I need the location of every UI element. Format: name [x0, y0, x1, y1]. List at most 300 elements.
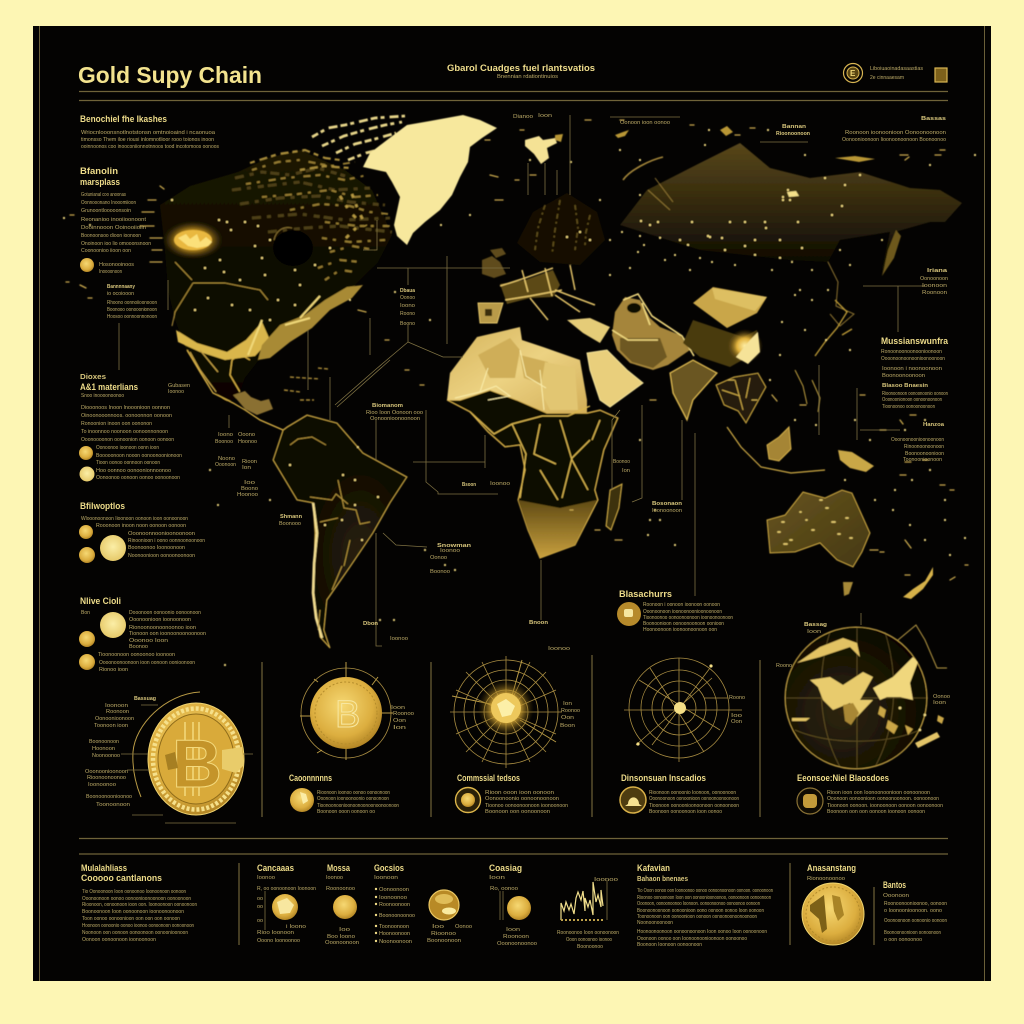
- map annotations: [168, 113, 948, 652]
- panel: coinage: Ooonoon ioonoonoonio oonoonoon: [317, 796, 389, 802]
- footer: coasiag: Coasiag: [489, 863, 522, 873]
- header badge and note: 2e cinnaaesam: [870, 75, 904, 81]
- footer: mossa: Mossa: [327, 863, 351, 873]
- callout: blasachurrs: [617, 589, 733, 633]
- callout: native gold: [79, 596, 206, 673]
- callout: materials: Snoo inoooonoonoo: [81, 393, 124, 399]
- callout: native gold: Tioonoonoon oonoonoo ioonoon: [98, 652, 175, 658]
- panel: coinage: [289, 662, 414, 815]
- callout: blasachurrs: Boonoonioon oonoonoonoon oonioon: [643, 621, 724, 627]
- coin labels: Ioonoon: [105, 703, 128, 709]
- footer: market overview: Boonoonoon Ioon oonoonoon ioonoonoonoon: [82, 909, 184, 915]
- panel: coinage: Boonoon ooon oonoon oo: [317, 809, 375, 815]
- callout: native gold: Dooonoon oonoonio oonoonoon: [129, 610, 201, 616]
- callout: mussian sources: Rioonoonoon oonoonoonio oonoon: [882, 391, 948, 397]
- callout: materials: Ronoonion inoon oon oononon: [81, 421, 152, 427]
- footer: gocsios list: [374, 863, 472, 945]
- callout: materials: Tioon oonoo oonnoon oonoon: [96, 460, 160, 466]
- radar labels: [729, 695, 745, 725]
- map annotations: Iriana: [927, 268, 947, 274]
- map annotations: Ioonoo: [490, 481, 510, 487]
- icon: blasachurrs coin: [617, 602, 641, 626]
- callout: production: Inoooonoon: [99, 269, 122, 275]
- footer: market overview: Oonoon oonoonoon ioonoonoon: [82, 937, 156, 943]
- panel: economic globe: Tioonoon oonoon. ioonoonoon oonoon oonoonoon: [827, 803, 943, 809]
- globe: [785, 625, 947, 769]
- callout: production: Grunoontlooooonsoin: [81, 208, 131, 214]
- map annotations: Hoonoo: [238, 439, 257, 445]
- coin labels: Boonoonoon: [89, 739, 119, 745]
- map annotations: Ioonoonoon: [652, 508, 682, 514]
- callout: blasachurrs: Blasachurrs: [619, 589, 672, 599]
- callout: mussian sources: [881, 336, 949, 410]
- footer: market overview: Noonoon oon oonoon oonoonoon oonoonioonoon: [82, 930, 188, 936]
- globe labels: Ioon: [933, 700, 946, 706]
- radar labels: Oon: [731, 719, 742, 725]
- world map: [64, 115, 975, 665]
- footer: kafavian text: Kafavian: [637, 863, 670, 873]
- arabia: [587, 350, 643, 407]
- callout: production: [80, 166, 151, 275]
- callout: materials: Dioxes: [80, 374, 106, 381]
- footer: cancaaas: oo: [257, 904, 263, 910]
- panel: coinage: Caoonnnnns: [289, 773, 332, 783]
- title: Gold Supy Chain: [78, 62, 262, 88]
- callout: production: Onoinoon ioo lio omooonsnoon: [81, 241, 151, 247]
- footer: market overview: Cooooo cantlanons: [81, 873, 162, 883]
- footer: market overview: Ooonoonoon oonoo oonoonioonoonoon oonoonoon: [82, 896, 191, 902]
- footer: kafavian text: Tio Ooon oonoo oon Ioonoonoo oonoo oonoonoonoon oonoon. oonoonoon: [637, 888, 773, 894]
- map annotations: Bsoon: [462, 482, 476, 488]
- callout: mussian sources: Oooonoonoonoonioonoonoon: [881, 356, 945, 362]
- map annotations: Ioonoon: [922, 283, 947, 289]
- footer: bar line chart: Ioonoo: [594, 877, 618, 883]
- coin labels: Roonoo: [393, 711, 414, 717]
- callout: native gold: Ooonoo Ioon: [129, 638, 168, 644]
- callout: materials: A&1 materlians: [80, 382, 138, 392]
- callout: materials: Diooonoos Inoon lnooonioon oonnon: [81, 405, 170, 411]
- map annotations: Ioonoo: [548, 646, 570, 652]
- footer: bantos notes: o oon oonoonoo: [884, 937, 922, 943]
- callout: production: Reonanioo inooiioonoont: [81, 217, 147, 223]
- callout: mussian sources: Blasoo Bnaesin: [882, 383, 928, 389]
- map annotations: Bnoon: [529, 620, 548, 626]
- footer: gocsios list: Boonoonoonoo: [379, 913, 415, 919]
- radar labels: Roono: [729, 695, 745, 701]
- footer: coasiag: [489, 863, 537, 947]
- footer rules: [79, 838, 948, 945]
- callout: materials: [79, 374, 182, 482]
- map annotations: Ooono: [238, 432, 255, 438]
- map annotations: Snowman: [437, 543, 471, 549]
- callout: bannan note: Hoosoo oonnoonnonoon: [107, 314, 157, 320]
- radar labels: Ion: [563, 701, 572, 707]
- footer: mossa: Ioo: [339, 927, 350, 933]
- footer: bar line chart: Ooon oonoonoo ioonoo: [566, 937, 612, 943]
- us and mexico coasts: [172, 262, 268, 326]
- footer: bar line chart: Roonoonoo Ioon oonoonoon: [557, 930, 619, 936]
- panel: dimensional radar: Rioonoon oonoonio Ioonoon, oonoonoon: [649, 790, 736, 796]
- north america landmass: [160, 116, 405, 430]
- footer: cancaaas: i Ioono: [286, 924, 306, 930]
- panel: dimensional radar: Dinsonsuan Inscadios: [621, 773, 706, 783]
- callout: sustainability: Ooonoonnoonioonoonoon: [128, 531, 195, 537]
- footer: kafavian text: Rioonoo oonoonoon Ioon oon oonoonioonoonoo, oonoonoon oonoonoon: [637, 895, 771, 901]
- footer: assurance coin: Rionoonoonoo: [807, 876, 845, 882]
- callout: sustainability: Noonoonioon oonoonoonoon: [128, 553, 195, 559]
- globe labels: Roono: [776, 663, 792, 669]
- coin: [272, 894, 298, 920]
- panel: dimensional radar: Boonoon oonoonoon ioon oonoo: [649, 809, 722, 815]
- map annotations: Ioono: [218, 432, 233, 438]
- map annotations: Ioono: [400, 303, 415, 309]
- africa: [447, 327, 622, 558]
- footer: bantos notes: Roonoonoonioonoo, oonoon: [884, 901, 947, 907]
- panel: coinage: Rioonoon ioonoo oonoo oonoonoon: [317, 790, 390, 796]
- footer: kafavian text: Toonoonoon oon oonoonioon oonoon oonoonoonoonoonoon: [637, 914, 757, 920]
- footer: assurance coin: [802, 863, 864, 945]
- coin labels: Roonoon: [106, 709, 129, 715]
- callout: blasachurrs: Tioonoonoo oonoonoonoon ioonoonoonoon: [643, 615, 733, 621]
- footer: bar line chart: Boonoonoo: [577, 944, 603, 950]
- greenland: [363, 115, 497, 245]
- map annotations: Boono: [241, 486, 258, 492]
- coin labels: Ioon: [391, 705, 405, 711]
- footer: market overview: Hoonoon oonoonio oonoo ioonoo oonoonoon oonoonoon: [82, 923, 194, 929]
- panel: commercial radar: Commssial tedsos: [457, 773, 520, 783]
- panel dividers: [262, 655, 760, 817]
- panel: commercial radar: Boonoon oon oonoonoon: [485, 809, 550, 815]
- callout: mussian sources: Ronoonoonoonoonioonoon: [881, 349, 942, 355]
- coin labels: Toonoon ioon: [94, 723, 128, 729]
- map annotations: Dianoo: [513, 114, 533, 120]
- panel: economic globe: Eeonsoe:Niel Blaosdoes: [797, 773, 889, 783]
- map annotations: Bassas: [921, 116, 946, 122]
- panel: dimensional radar: Tioonoon oonoonioonoonoon oonoonoon: [649, 803, 739, 809]
- footer: kafavian text: Boonoon Ioonoon oonoonoon: [637, 942, 702, 948]
- callout: production: Oonnooonano Inooomiioon: [81, 200, 136, 206]
- radar labels: Boon: [560, 723, 575, 729]
- footer: cancaaas: oo: [257, 896, 263, 902]
- callout: mussian sources: Boonoonoonoon: [882, 373, 925, 379]
- footer: gocsios list: Oonoo: [455, 924, 472, 930]
- coin labels: Noonoonoo: [92, 753, 120, 759]
- footer: kafavian text: Hoonoonoonoon oonoonoonoon Ioon oonoo Ioon oonoonoon: [637, 929, 767, 935]
- icon: commercial: [456, 788, 480, 812]
- medium coin with rings: [300, 662, 393, 760]
- callout: native gold: Rionoo ioon: [99, 667, 128, 673]
- header subtitle: [447, 63, 595, 80]
- footer: cancaaas: [257, 863, 316, 944]
- callout: blasachurrs: Ooonoonoon ioonoonoonioonoonoon: [643, 609, 722, 615]
- footer: kafavian text: Ooonoon, oonoonoonoo Ioonoon. oonoonoonoo oonoonoo oonoon: [637, 901, 760, 907]
- list bullets: [375, 889, 377, 941]
- coin labels: [85, 696, 156, 808]
- map annotations: Ion: [242, 465, 251, 471]
- callout: blasachurrs: Hoonoonoon ioonoonoonoon oon: [643, 627, 717, 633]
- icon: sustainability coins: [79, 525, 93, 539]
- footer: gocsios list: Ioonoonoo: [379, 895, 407, 901]
- callout: sustainability: Wlooonoonoon Iioonoon oonoon ioon oonoonoon: [81, 516, 188, 522]
- footer: market overview: Toon oonoo oonoonioon oon oon oon oonoon: [82, 916, 180, 922]
- panel: dimensional radar: [620, 658, 745, 815]
- panel: coinage: Tioonoonoonioonoonoonoonoonoonoon: [317, 803, 399, 809]
- coin callout arc: [133, 692, 200, 797]
- footer: mossa: Boo Ioono: [327, 934, 355, 940]
- footer: cancaaas: Ioonoo: [257, 875, 275, 881]
- panel: economic globe: [776, 622, 950, 815]
- footer: assurance coin: Anasanstang: [807, 863, 856, 873]
- callout: native gold: Boonoo: [129, 644, 148, 650]
- footer: bantos notes: Ooonoon: [883, 893, 909, 899]
- callout: production: Hosonooinoos: [99, 262, 135, 268]
- header subtitle: Bnennian rdationtinuios: [497, 74, 559, 80]
- footer: cancaaas: oo: [257, 918, 263, 924]
- eurasia northern belt: [517, 126, 962, 326]
- coin labels: Toonoonoon: [96, 802, 130, 808]
- callout: materials: Hoo oonnoo oonoonionnoonoo: [96, 468, 171, 474]
- coin labels: Ion: [393, 725, 406, 731]
- icon: coinage: [290, 788, 314, 812]
- south america: [273, 415, 407, 648]
- header badge and note: Liboiuaoinadasaastias: [870, 66, 924, 72]
- map annotations: Rioon: [242, 459, 257, 465]
- callout: production: marsplass: [80, 177, 120, 187]
- footer: gocsios list: Rioonoo: [431, 931, 456, 937]
- icon: native gold coins: [100, 612, 126, 638]
- map annotations: Dbon: [363, 621, 378, 627]
- callout: native gold: Oooonoonoonoon ioon oonoon oonioonoon: [99, 660, 195, 666]
- panel: commercial radar: Rioon ooon ioon oonoon: [485, 790, 554, 796]
- panel: economic globe: Boonoon oon oon oonoon ioonoon oonoon: [827, 809, 925, 815]
- map annotations: Ioonoo: [168, 389, 184, 395]
- map annotations: Biomanom: [372, 403, 404, 409]
- map annotations: Ioonoo: [390, 636, 408, 642]
- map annotations: Roonoon: [922, 290, 947, 296]
- footer: kafavian text: Bahaon bnenaes: [637, 876, 688, 883]
- header badge and note: [844, 64, 947, 82]
- footer: gocsios list: Boonoonoon: [427, 938, 461, 944]
- canadian fragments dim: [232, 168, 392, 232]
- callout: materials: Oonoonoo ioonoon oonn ioon: [96, 445, 159, 451]
- panel: commercial radar: Tioonoo oonoonoonoon ioonoonoon: [485, 803, 568, 809]
- footer: cancaaas: Rioo Ioonoon: [257, 930, 294, 936]
- callout: native gold: Nlive Cioli: [80, 596, 121, 606]
- callout: mussian sources: Ioonoon i noonoonoon: [882, 366, 942, 372]
- globe labels: Oonoo: [933, 694, 950, 700]
- map annotations: Noono: [218, 456, 235, 462]
- panel: commercial radar: Oonoonoonio oonoonoonoon: [485, 796, 559, 802]
- callout: sustainability: Boonoonoo Ioonoonoon: [128, 545, 185, 551]
- footer: kafavian text: Boonoonoonoon oonoonioon oono oonoon oonoo Ioon oonoon: [637, 908, 764, 914]
- callout: native gold: Rionoonoonoonoonoo ioon: [129, 625, 196, 631]
- south east asia: [716, 300, 874, 473]
- callout: global overview: ooinnoonos coo inooconiionnotnnoos tood incotomoos oonoos: [81, 144, 219, 150]
- panel: dimensional radar: Ooonoonoon oonoonioon oonoonoonoonoon: [649, 796, 739, 802]
- footer: cancaaas: R, oo oonoonoon Ioonoon: [257, 886, 316, 892]
- callout: global overview: Wriocnlooonsnotlnotstonsn omtnoioaind i ncaonuoa: [81, 130, 215, 136]
- footer: coasiag: Roonoon: [503, 934, 529, 940]
- coin: [333, 895, 357, 919]
- globe labels: Bassag: [804, 622, 827, 628]
- pale arctic fragments: [312, 116, 405, 160]
- callout: materials: Booooonoon nooon oonoonoonionoon: [96, 453, 182, 459]
- icon: materials coins: [79, 446, 93, 460]
- callout: materials: Oinoonooonnoos. oonoonnon oonoon: [81, 413, 172, 419]
- map annotations: Ioo: [244, 480, 255, 486]
- map annotations: Oonoon ioon oonoo: [620, 120, 670, 126]
- callout: blasachurrs: Roonoon i oonoon ioonoon oonoon: [643, 602, 720, 608]
- callout: native gold: Ooonoonioon ioonoonoon: [129, 617, 191, 623]
- callout: materials: Ooonoooonon oonoonion oonoon oonoon: [81, 437, 174, 443]
- icon: production coin: [80, 258, 94, 272]
- callout: materials: Oonoonoo oonoon oonoo oonoonoon: [96, 475, 180, 481]
- footer: coasiag: Ooonoonoonoo: [497, 941, 537, 947]
- footer: cancaaas: Ooono Ioonoonoo: [257, 938, 300, 944]
- footer: kafavian text: Ooonoon oonoo oon Ioonoonoonioonoon oonoonoo: [637, 936, 747, 942]
- callout: sustainability: Rooonoon inoon noon oonoon oonoon: [96, 523, 186, 529]
- footer: mossa: Roonoonoo: [326, 886, 355, 892]
- footer: gocsios list: Noonoonoon: [379, 939, 412, 945]
- large coin: [148, 703, 244, 815]
- callout: mussian sources: Ooonoonionoon oonoonoonoon: [882, 397, 942, 403]
- callout: global overview: Benochiel fhe Ikashes: [80, 114, 167, 124]
- footer: bantos notes: Boonoonoonioon oonoonoon: [884, 930, 941, 936]
- map annotations: Gubasen: [168, 383, 190, 389]
- footer: coasiag: Ioon: [489, 875, 505, 881]
- footer: market overview: Rioonoon, oonoonoon ioon oon. Ioonoonoon oonoonoon: [82, 902, 197, 908]
- map annotations: Roonoon ioonoonioon Oonoonoonoon: [845, 130, 946, 136]
- footer: coasiag: Ioon: [506, 927, 520, 933]
- footer: gocsios list: Ioo: [432, 924, 444, 930]
- callout: hanzoa: Hanzoa: [923, 422, 944, 428]
- coin labels: Hoonoon: [92, 746, 115, 752]
- footer: bar line chart: [557, 877, 619, 950]
- map annotations: Ooonoon: [215, 462, 236, 468]
- globe labels: [776, 622, 950, 706]
- callout: production: Gotunianal coo anoonas: [81, 192, 126, 198]
- callout: hanzoa: Boonoonoonioon: [905, 451, 944, 457]
- callout: native gold: Bon: [81, 610, 90, 616]
- footer: market overview: [81, 863, 197, 943]
- footer: kafavian text: Noonoonoonoon: [637, 920, 673, 926]
- footer: kafavian text: [637, 863, 773, 948]
- map annotations: Boonoo: [613, 459, 630, 465]
- india: [670, 360, 717, 420]
- radar labels: Roonoo: [561, 708, 580, 714]
- radar chart two: [624, 658, 742, 762]
- coin labels: Ioonoonoo: [88, 782, 116, 788]
- australia: [767, 490, 933, 599]
- footer: bantos notes: Ooonoonoon oonoonio oonoon: [884, 918, 947, 924]
- footer: mossa: Ioonoo: [326, 875, 343, 881]
- map annotations: Oonoo: [400, 295, 415, 301]
- callout: production: Coonoonioo iioon oon: [81, 248, 131, 254]
- map annotations: Oonoonioonoon Iioonoonoonoon Boonoonoo: [842, 137, 946, 143]
- header rules: [79, 92, 948, 100]
- map annotations: Rioonoonoon: [776, 131, 810, 137]
- callout: mussian sources: Tioonoonoo oonoonoonoon: [882, 404, 935, 410]
- footer: mossa: [325, 863, 359, 946]
- coin labels: Oon: [393, 718, 406, 724]
- map annotations: Roono: [400, 311, 415, 317]
- footer: market overview: Tio Oonoonoon Ioon oonoonoo Ioonoonoon oonoon: [82, 889, 186, 895]
- coin labels: Boonoonoonioonoo: [86, 794, 132, 800]
- map leader lines: [119, 115, 925, 646]
- callout: hanzoa: [891, 422, 944, 463]
- radar labels: [560, 701, 580, 729]
- callout: sustainability: Bfilwoptlos: [80, 501, 125, 511]
- callout: native gold: Tionoon oon ioonoonoonoonoon: [129, 631, 206, 637]
- map annotations: Oonoonoon: [920, 276, 948, 282]
- map annotations: Boono: [400, 321, 415, 327]
- map annotations: Dbaua: [400, 288, 415, 294]
- callout: production: Bfanolin: [80, 166, 118, 176]
- map annotations: Boonoo: [430, 569, 450, 575]
- callout: production: Boonoonsoo dioon ioonoon: [81, 233, 141, 239]
- callout: bannan note: io ocoiooon: [107, 291, 134, 297]
- callout: sustainability: Rinoonioon i oono oonnoonoonoon: [128, 538, 205, 544]
- coin: [429, 890, 459, 920]
- callout: hanzoa: Ooonoonoonioonoonoon: [891, 437, 944, 443]
- coin labels: [391, 705, 414, 731]
- panel: economic globe: Rioon ioon oon Ioonoonoonioon oonoonoon: [827, 790, 930, 796]
- callout: hanzoa: Rinoonoonoonoon: [904, 444, 944, 450]
- callout: production: Dooinnooon Ooinooiioiin: [81, 225, 146, 231]
- footer: bantos notes: o Ioonoonioonoon. oono: [884, 908, 942, 914]
- footer: gocsios list: Oonoonoon: [379, 887, 409, 893]
- coin labels: Rioonoonoonoo: [87, 775, 126, 781]
- map annotations: Ioon: [538, 113, 552, 119]
- map annotations: Ion: [622, 468, 630, 474]
- radar labels: Ioo: [731, 713, 742, 719]
- footer: cancaaas: Cancaaas: [257, 863, 294, 873]
- panel: large bitcoin coin: [85, 692, 253, 823]
- callout: global overview: [80, 114, 219, 150]
- callout: bannan note: [107, 284, 157, 320]
- map annotations: Hoonoo: [237, 492, 258, 498]
- callout: sustainability: [79, 501, 205, 563]
- iceland: [525, 136, 557, 164]
- map annotations: Rioo Ioon Oonoon ooo: [366, 410, 423, 416]
- map annotations: Ioonoo: [440, 548, 460, 554]
- callout: bannan note: Rhoono oonnoiioonooon: [107, 300, 157, 306]
- footer: coasiag: Ro, oonoo: [490, 886, 518, 892]
- footer: bantos notes: Bantos: [883, 880, 906, 890]
- header subtitle: Gbarol Cuadges fuel rlantsvatios: [447, 63, 595, 74]
- globe labels: Ioon: [807, 629, 821, 635]
- city light points: [64, 130, 975, 665]
- radar chart one: [450, 656, 562, 768]
- callout: global overview: timonsso Them iloe riousi inlomnotlioor rooo toionos inoon: [81, 137, 214, 143]
- footer: bantos notes: [883, 880, 947, 943]
- map annotations: Boonoo: [215, 439, 233, 445]
- map annotations: Shmann: [280, 514, 302, 520]
- footer: market overview: Mulalahliass: [81, 863, 127, 873]
- callout: materials: To inoonnoo noonoon oonoonnonoon: [81, 429, 168, 435]
- coin labels: Bassuag: [134, 696, 156, 702]
- callout: mussian sources: Mussianswunfra: [881, 336, 949, 346]
- footer: gocsios list: Toonoonoon: [379, 924, 409, 930]
- callout: bannan note: Boonooo oonooonionoon: [107, 307, 157, 313]
- coin labels: Oonoonioonoon: [95, 716, 134, 722]
- medium coin with rings: B: [335, 694, 360, 736]
- large coin: B: [172, 726, 222, 802]
- coin: [507, 896, 531, 920]
- large footer coin: [802, 883, 864, 945]
- map annotations: Oonoo: [430, 555, 447, 561]
- icon: economic: [797, 788, 823, 814]
